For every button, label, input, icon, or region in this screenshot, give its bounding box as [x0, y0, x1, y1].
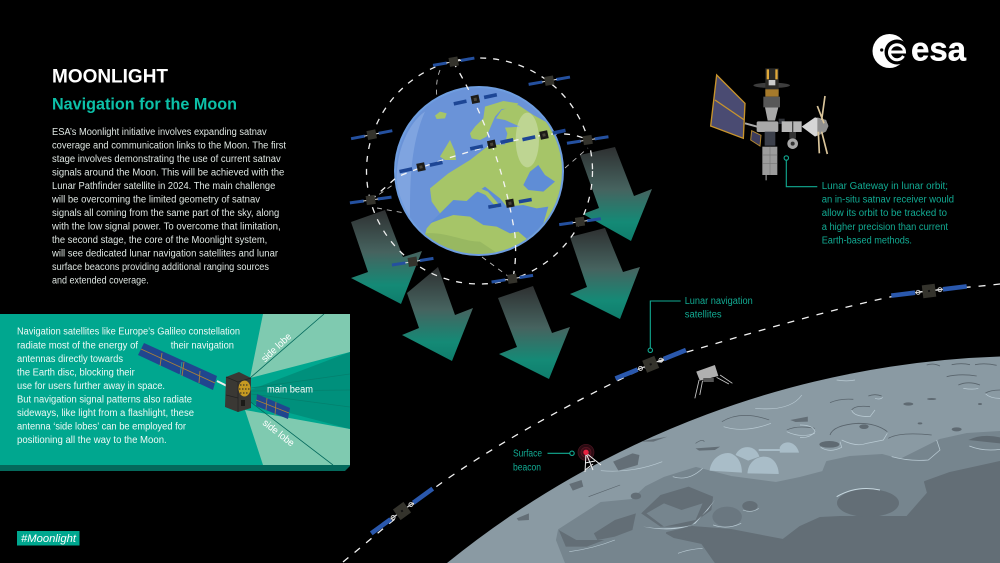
intro text block: stage involves demonstrating the use of current satnav: [52, 154, 281, 165]
leader: lunar navigation satellites: [648, 301, 681, 352]
satellites around Earth: [349, 54, 609, 286]
ESA logo: esa: [911, 31, 967, 68]
intro text block: signals all coming from the same part of the sky, along: [52, 208, 279, 219]
text: surface beacon: beacon: [513, 462, 541, 473]
orbit: outer ring: [366, 58, 592, 284]
intro text block: coverage and communication links to the Moon. The first: [52, 140, 286, 152]
orbits behind Earth: [371, 70, 588, 279]
text: Lunar Gateway: [822, 181, 954, 246]
lunar navigation satellites: [367, 280, 968, 539]
mid-tone mare: [557, 432, 1000, 563]
left dark basin: [559, 513, 636, 547]
text: surface beacon: [513, 449, 542, 473]
rim shadows: [830, 364, 1000, 438]
orbit: lunar: [343, 284, 1000, 562]
panel text: positioning all the way to the Moon.: [17, 435, 167, 446]
panel text: their navigation: [171, 340, 234, 351]
light patch over Russia: [516, 113, 539, 167]
capsule: [802, 117, 828, 137]
panel: side lobes explainer: [0, 314, 350, 471]
panel text: But navigation signal patterns also radiate: [17, 394, 192, 406]
surface beacon: [578, 444, 601, 472]
lunar base domes: [710, 442, 799, 474]
Sahara shade: [425, 233, 496, 254]
intro text block: will see dedicated lunar navigation satellites and lunar: [51, 249, 279, 260]
panel text: [17, 327, 240, 446]
rim highlights: [569, 395, 815, 553]
rim highlights: [800, 380, 1000, 460]
panel text: radiate most of the energy of: [17, 340, 138, 351]
orbits across Earth: [371, 62, 588, 278]
satellite illustration: [138, 343, 290, 419]
small dark craters: [742, 501, 758, 511]
intro text block: [51, 127, 286, 287]
continent land: [425, 105, 562, 254]
text: Lunar Gateway: Lunar Gateway in lunar orbit;: [822, 181, 948, 192]
title: MOONLIGHT: [52, 66, 168, 88]
subtitle: Navigation for the Moon: [52, 94, 237, 113]
lunar lander: [695, 365, 732, 398]
ESA logo: [872, 31, 967, 68]
text: surface beacon: Surface: [513, 449, 542, 460]
text: Lunar Gateway: an in-situ satnav receiver would: [822, 195, 954, 206]
left side features: [517, 395, 815, 553]
text: Lunar Gateway: allow its orbit to be tracked to: [822, 208, 947, 219]
Moon surface: [447, 356, 1000, 563]
lower modules: [765, 132, 775, 146]
small array: [751, 131, 761, 146]
panel text: use for users further away in space.: [17, 381, 165, 392]
text: lunar navigation satellites: satellites: [685, 310, 722, 321]
panel background: [0, 314, 350, 465]
leader: Lunar Gateway: [784, 156, 817, 187]
intro text block: ESA’s Moonlight initiative involves expanding satnav: [52, 127, 267, 138]
Britain and Ireland: [435, 112, 456, 160]
Lunar Gateway: [711, 68, 828, 180]
dark crater spots: [819, 398, 1000, 448]
crossed panels: [817, 96, 827, 154]
text: Lunar Gateway: a higher precision than current: [822, 222, 948, 233]
label: main beam: main beam: [267, 385, 313, 396]
dark crater floor: [837, 489, 899, 517]
solar array: [711, 75, 745, 138]
Mediterranean sea: [430, 187, 548, 242]
intro text block: signals around the Moon. This will be achieved with the: [52, 168, 285, 178]
rim shadows: [589, 415, 815, 497]
panel text: antennas directly towards: [17, 354, 123, 365]
panel text: sideways, like light from a flashlight, these: [17, 408, 194, 419]
central modules: [757, 121, 778, 132]
text: Lunar Gateway: Earth-based methods.: [822, 235, 912, 246]
hashtag label: #Moonlight: [21, 533, 77, 545]
dark mare: [667, 462, 1000, 563]
beam diagram: [245, 314, 350, 465]
surface dark blotches: [517, 417, 808, 521]
intro text block: with the low signal power. To overcome that limitation,: [51, 222, 281, 233]
Black Sea: [523, 165, 555, 192]
panel text: Navigation satellites like Europe’s Galileo constellation: [17, 327, 240, 338]
intro text block: the second stage, the core of the Moonlight system,: [52, 235, 267, 246]
text: lunar navigation satellites: [685, 296, 753, 321]
intro text block: Lunar Pathfinder satellite in 2024. The main challenge: [52, 181, 276, 192]
signal arrows: [351, 147, 652, 379]
right side features: [800, 364, 1000, 517]
text: lunar navigation satellites: Lunar navigation: [685, 296, 753, 307]
label: lower side lobe: side lobe: [260, 418, 296, 449]
intro text block: surface beacons providing additional ranging sources: [52, 262, 269, 273]
panel text: the Earth disc, blocking their: [17, 367, 135, 378]
Earth globe: [394, 86, 564, 256]
large crater: [641, 487, 713, 527]
ocean sheen: [397, 112, 425, 218]
upper modules: [753, 83, 790, 88]
intro text block: will be overcoming the limited geometry of satnav: [51, 195, 260, 206]
leader: surface beacon: [548, 451, 574, 455]
docking ring: [789, 132, 796, 139]
Scandinavia: [470, 101, 518, 140]
intro text block: and extended coverage.: [52, 276, 149, 287]
panel shadow edge: [0, 465, 350, 471]
label: upper side lobe: side lobe: [260, 331, 294, 365]
panel text: antenna ‘side lobes’ can be employed for: [17, 422, 187, 433]
Italy: [475, 188, 498, 207]
